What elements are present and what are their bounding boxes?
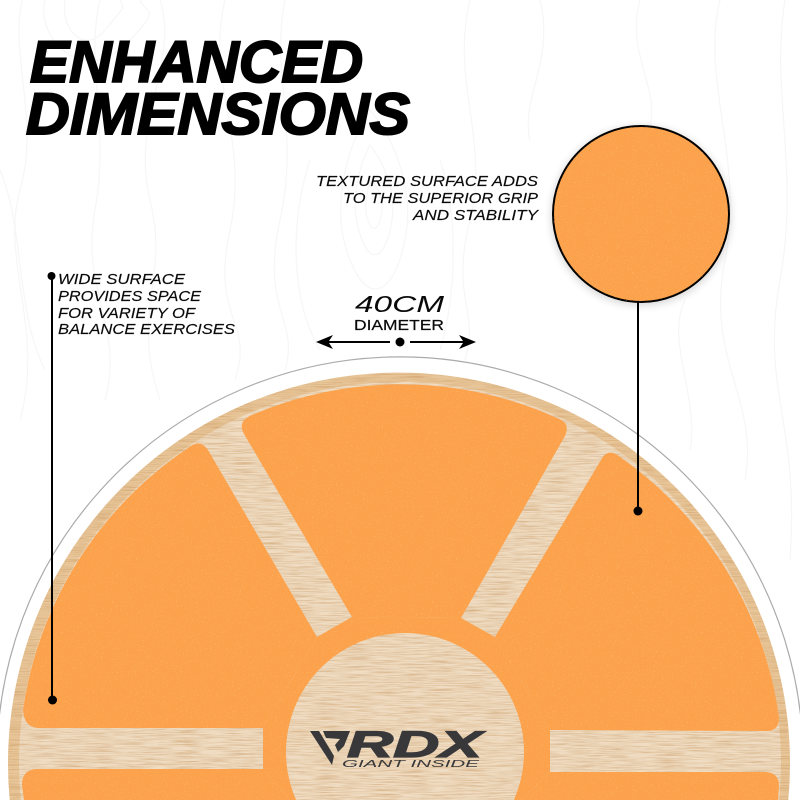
RDX logo — [310, 724, 486, 770]
logo emblem — [310, 731, 350, 765]
callout text: wide surface — [58, 272, 235, 338]
callout text: textured surface — [316, 174, 540, 224]
callout text: textured surface: TEXTURED SURFACE ADDS — [316, 174, 538, 190]
callout text: textured surface: TO THE SUPERIOR GRIP — [343, 191, 538, 207]
diameter label — [354, 291, 445, 334]
outer dimension ring — [0, 357, 800, 800]
leader line: textured surface — [634, 302, 642, 516]
title: DIMENSIONS — [26, 82, 410, 147]
logo wordmark: RDX — [347, 724, 486, 765]
callout text: textured surface: AND STABILITY — [412, 208, 540, 224]
title — [26, 30, 410, 147]
leader line: wide surface — [48, 272, 57, 704]
title: ENHANCED — [30, 30, 363, 95]
diameter label: DIAMETER — [354, 318, 444, 334]
wood grain texture — [0, 340, 800, 800]
callout text: wide surface: PROVIDES SPACE — [58, 289, 201, 305]
callout text: wide surface: FOR VARIETY OF — [58, 306, 196, 322]
background wood grain lines — [0, 0, 792, 560]
callout text: wide surface: BALANCE EXERCISES — [58, 322, 235, 338]
zoomed texture circle — [551, 126, 731, 306]
inner wood surface — [19, 382, 781, 800]
logo tagline: GIANT INSIDE — [342, 759, 480, 770]
wood rim — [8, 373, 790, 800]
callout text: wide surface: WIDE SURFACE — [58, 272, 185, 288]
diameter arrows — [316, 335, 476, 349]
diameter label: 40CM — [355, 291, 445, 317]
orange grip surface — [22, 384, 779, 800]
balance board disc — [0, 340, 800, 800]
